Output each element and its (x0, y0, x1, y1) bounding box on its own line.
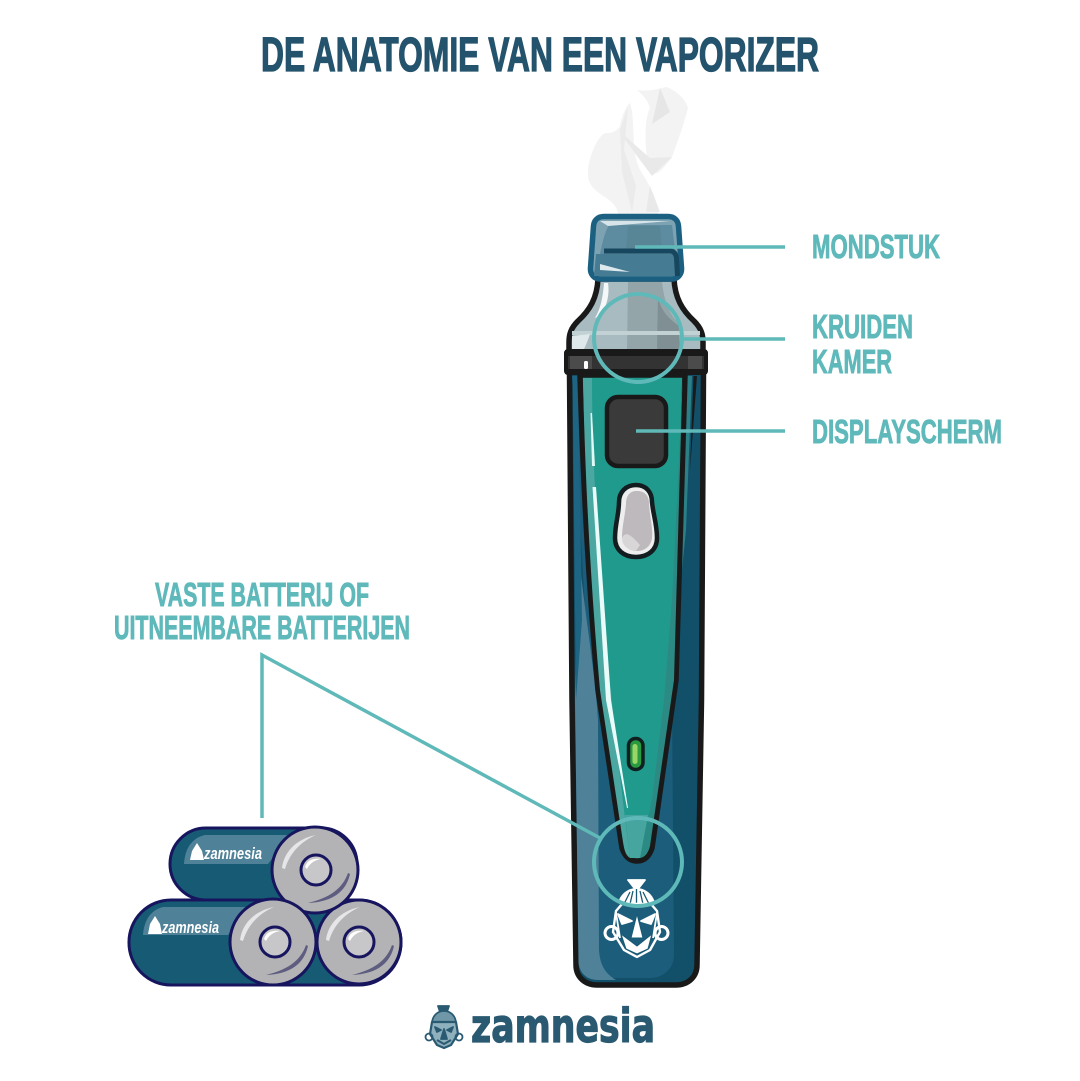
glass chamber (569, 279, 703, 352)
wedge left highlight (583, 378, 630, 858)
battery: bottom left (129, 899, 316, 985)
label: batteries (114, 576, 410, 646)
display screen (607, 397, 666, 466)
battery brand: zamnesia (161, 918, 219, 937)
label: kruiden kamer (812, 308, 913, 380)
wedge right shade (639, 378, 682, 858)
right side teal strip and inner line (679, 376, 697, 600)
body left blue strip (572, 376, 582, 700)
logo wordmark: zamnesia (471, 999, 655, 1053)
label: kruiden kamer: KAMER (812, 343, 892, 380)
callout circle: battery (594, 818, 682, 906)
leader line: mouthpiece (635, 245, 785, 249)
vaporizer pen (565, 216, 707, 985)
footer logo (426, 999, 655, 1053)
collar band (565, 350, 707, 374)
battery brand: zamnesia (203, 844, 262, 863)
teal front wedge (580, 375, 685, 861)
label: kruiden kamer: KRUIDEN (812, 308, 913, 345)
battery: bottom right (230, 900, 401, 985)
battery: top (170, 827, 358, 913)
body shell (570, 372, 704, 985)
battery brand mark (148, 916, 162, 934)
title: DE ANATOMIE VAN EEN VAPORIZER (261, 29, 819, 82)
leader line: display (636, 429, 785, 433)
battery brand mark (190, 843, 204, 860)
body light left strip (575, 540, 616, 980)
smoke from mouthpiece (588, 87, 688, 214)
LED indicator (628, 738, 643, 770)
wedge tip (625, 815, 648, 858)
label: mondstuk: MONDSTUK (812, 228, 940, 265)
logo icon: mask (426, 1006, 462, 1048)
label: batteries: VASTE BATTERIJ OF (155, 576, 369, 613)
body centre panel (572, 376, 690, 978)
label: batteries: UITNEEMBARE BATTERIJEN (114, 609, 410, 646)
mouthpiece (590, 216, 682, 279)
button (615, 485, 657, 557)
leader line: battery (262, 655, 600, 838)
white reflections (590, 413, 628, 808)
leader line: herb chamber (682, 337, 785, 341)
batteries (129, 827, 401, 985)
callout circle: chamber (594, 294, 682, 382)
logo mask on body (605, 880, 668, 957)
